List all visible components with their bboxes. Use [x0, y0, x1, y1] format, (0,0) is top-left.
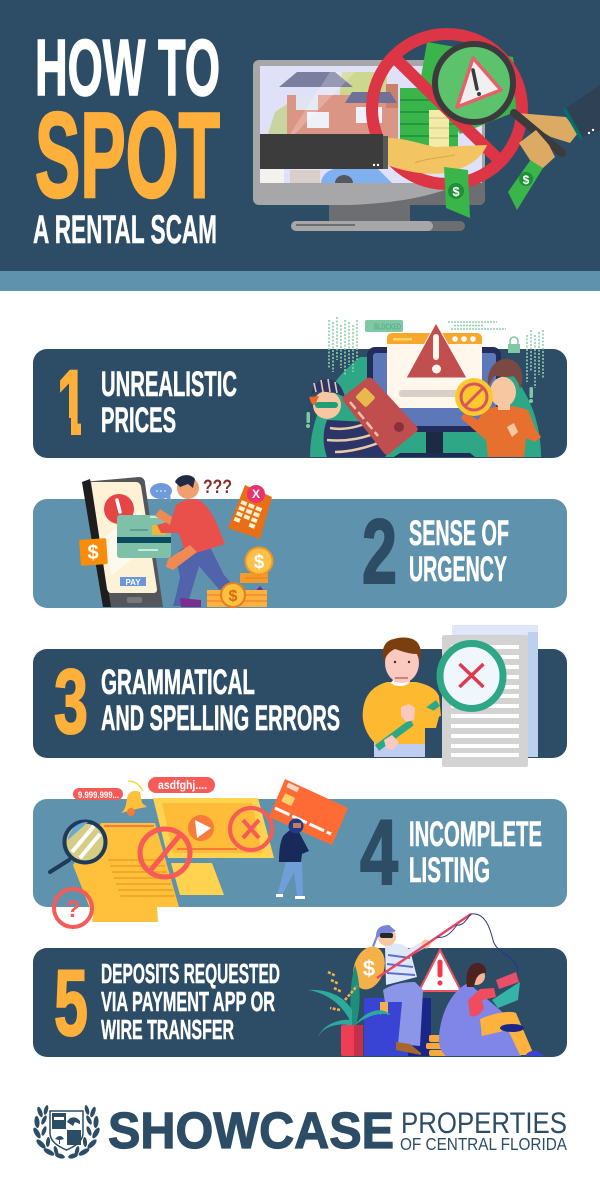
icon: x badge [230, 808, 272, 850]
icon: credit card [117, 515, 171, 558]
icon: calculator: X [252, 487, 260, 501]
icon: matrix code [329, 317, 543, 388]
question marks: ??? [203, 477, 232, 498]
icon: falling bills: $ [452, 184, 460, 199]
wordmark [108, 1102, 567, 1159]
wordmark: OF CENTRAL FLORIDA [400, 1134, 567, 1154]
tag: gibberish: asdfghj.... [158, 778, 207, 792]
icon: documents [442, 625, 538, 767]
icon: orange credit card [269, 779, 348, 845]
icon: coins: $ [254, 552, 265, 573]
icon: woman on beanbag [439, 963, 545, 1056]
panel: row 1 [33, 317, 567, 458]
icon: monitor [253, 60, 485, 231]
icon: prohibition ring [372, 34, 522, 184]
icon: video window [153, 798, 274, 858]
icon: long document [73, 823, 179, 922]
heading: incomplete listing: LISTING [409, 851, 490, 890]
icon: dollar tag: $ [87, 542, 99, 564]
heading: unrealistic prices [101, 365, 237, 440]
number 5: 5 [54, 950, 88, 1055]
icon: falling bills: $ [523, 173, 530, 187]
icon: coins: $ [229, 588, 238, 605]
heading: sense of urgency: SENSE OF [409, 514, 509, 553]
wordmark: PROPERTIES [401, 1107, 567, 1140]
icon: magnifier [377, 644, 503, 748]
icon: coins [426, 1035, 473, 1056]
illustration: man pushing card out of phone [79, 475, 272, 607]
panel: row 4 [33, 777, 567, 927]
icon: thief with fishing rod: $ [363, 956, 375, 981]
icon: prohibition ring [140, 829, 190, 877]
icon: phone [82, 477, 163, 607]
icon: child with stop sign [455, 359, 541, 457]
panel: row 2 [33, 475, 567, 608]
panel: row 5 [33, 914, 567, 1057]
icon: exclamation marks [306, 387, 533, 428]
icon: magnifier with warning triangle [435, 44, 513, 122]
heading: unrealistic prices: UNREALISTIC [101, 365, 237, 404]
title: A RENTAL SCAM [33, 208, 217, 252]
title: SPOT [35, 87, 220, 223]
icon: phone: PAY [125, 578, 141, 587]
title: HOW TO [35, 23, 220, 112]
heading: deposits requested [101, 958, 280, 1045]
number 2: 2 [362, 501, 397, 603]
heading: deposits requested: VIA PAYMENT APP OR [101, 986, 275, 1017]
icon: thief with credit card [309, 378, 418, 457]
icon: hand with sleeve [260, 134, 487, 174]
title [33, 23, 220, 252]
heading: grammatical and spelling errors: AND SPELLING ERRORS [101, 699, 340, 738]
number 4: 4 [360, 802, 398, 904]
logo: Showcase Properties of Central Florida [32, 1102, 567, 1160]
icon: falling bills [444, 155, 543, 218]
heading: incomplete listing [409, 815, 542, 890]
wordmark: SHOWCASE [108, 1102, 394, 1159]
icon: thief with fishing rod [348, 914, 518, 1055]
panel: row 3 [33, 625, 567, 767]
heading: sense of urgency: URGENCY [409, 550, 507, 589]
icon: gripping hand [514, 85, 600, 168]
icon: small chart [171, 863, 224, 895]
icon: forearm and hands [384, 703, 440, 750]
header illustration: monitor with scam warning [253, 34, 600, 231]
number 1: 1 [57, 352, 87, 454]
icon: plant [308, 965, 391, 1056]
icon: box seat [364, 998, 431, 1056]
illustration: thief, warning window, child [306, 317, 543, 457]
icon: dollar tag [79, 538, 108, 566]
heading: sense of urgency [409, 514, 509, 589]
illustration: phishing thief and woman on beanbag [308, 914, 545, 1056]
heading: grammatical and spelling errors [101, 663, 340, 738]
icon: blocked tag [365, 320, 403, 332]
icon: money stack [400, 42, 520, 148]
illustration: person with magnifier and document [363, 625, 538, 767]
icon: lock [508, 337, 520, 353]
icon: question badge [54, 889, 92, 927]
number 3: 3 [54, 651, 88, 753]
heading: grammatical and spelling errors: GRAMMATICAL [101, 663, 255, 702]
icon: bell [121, 781, 147, 816]
icon: hooded thief [276, 818, 309, 899]
icon: speech bubble [150, 483, 172, 502]
icon: laurel crest [32, 1105, 101, 1160]
header band [0, 0, 600, 291]
icon: calculator [228, 485, 272, 539]
icon: warning triangle [419, 950, 461, 991]
icon: magnifier [50, 822, 106, 872]
icon: blocked tag: BLOCKED [374, 322, 401, 332]
illustration: incomplete listing documents and hooded thief [50, 777, 348, 927]
icon: question badge: ? [66, 896, 80, 923]
icon: monitor [367, 323, 501, 457]
icon: person [363, 637, 441, 757]
heading: deposits requested: WIRE TRANSFER [101, 1014, 234, 1045]
tag: amount: 9.999.999... [78, 790, 119, 800]
icon: man [155, 475, 265, 607]
heading: deposits requested: DEPOSITS REQUESTED [101, 958, 280, 989]
heading: unrealistic prices: PRICES [101, 401, 176, 440]
icon: coins [207, 548, 272, 607]
number 1 [50, 352, 92, 454]
